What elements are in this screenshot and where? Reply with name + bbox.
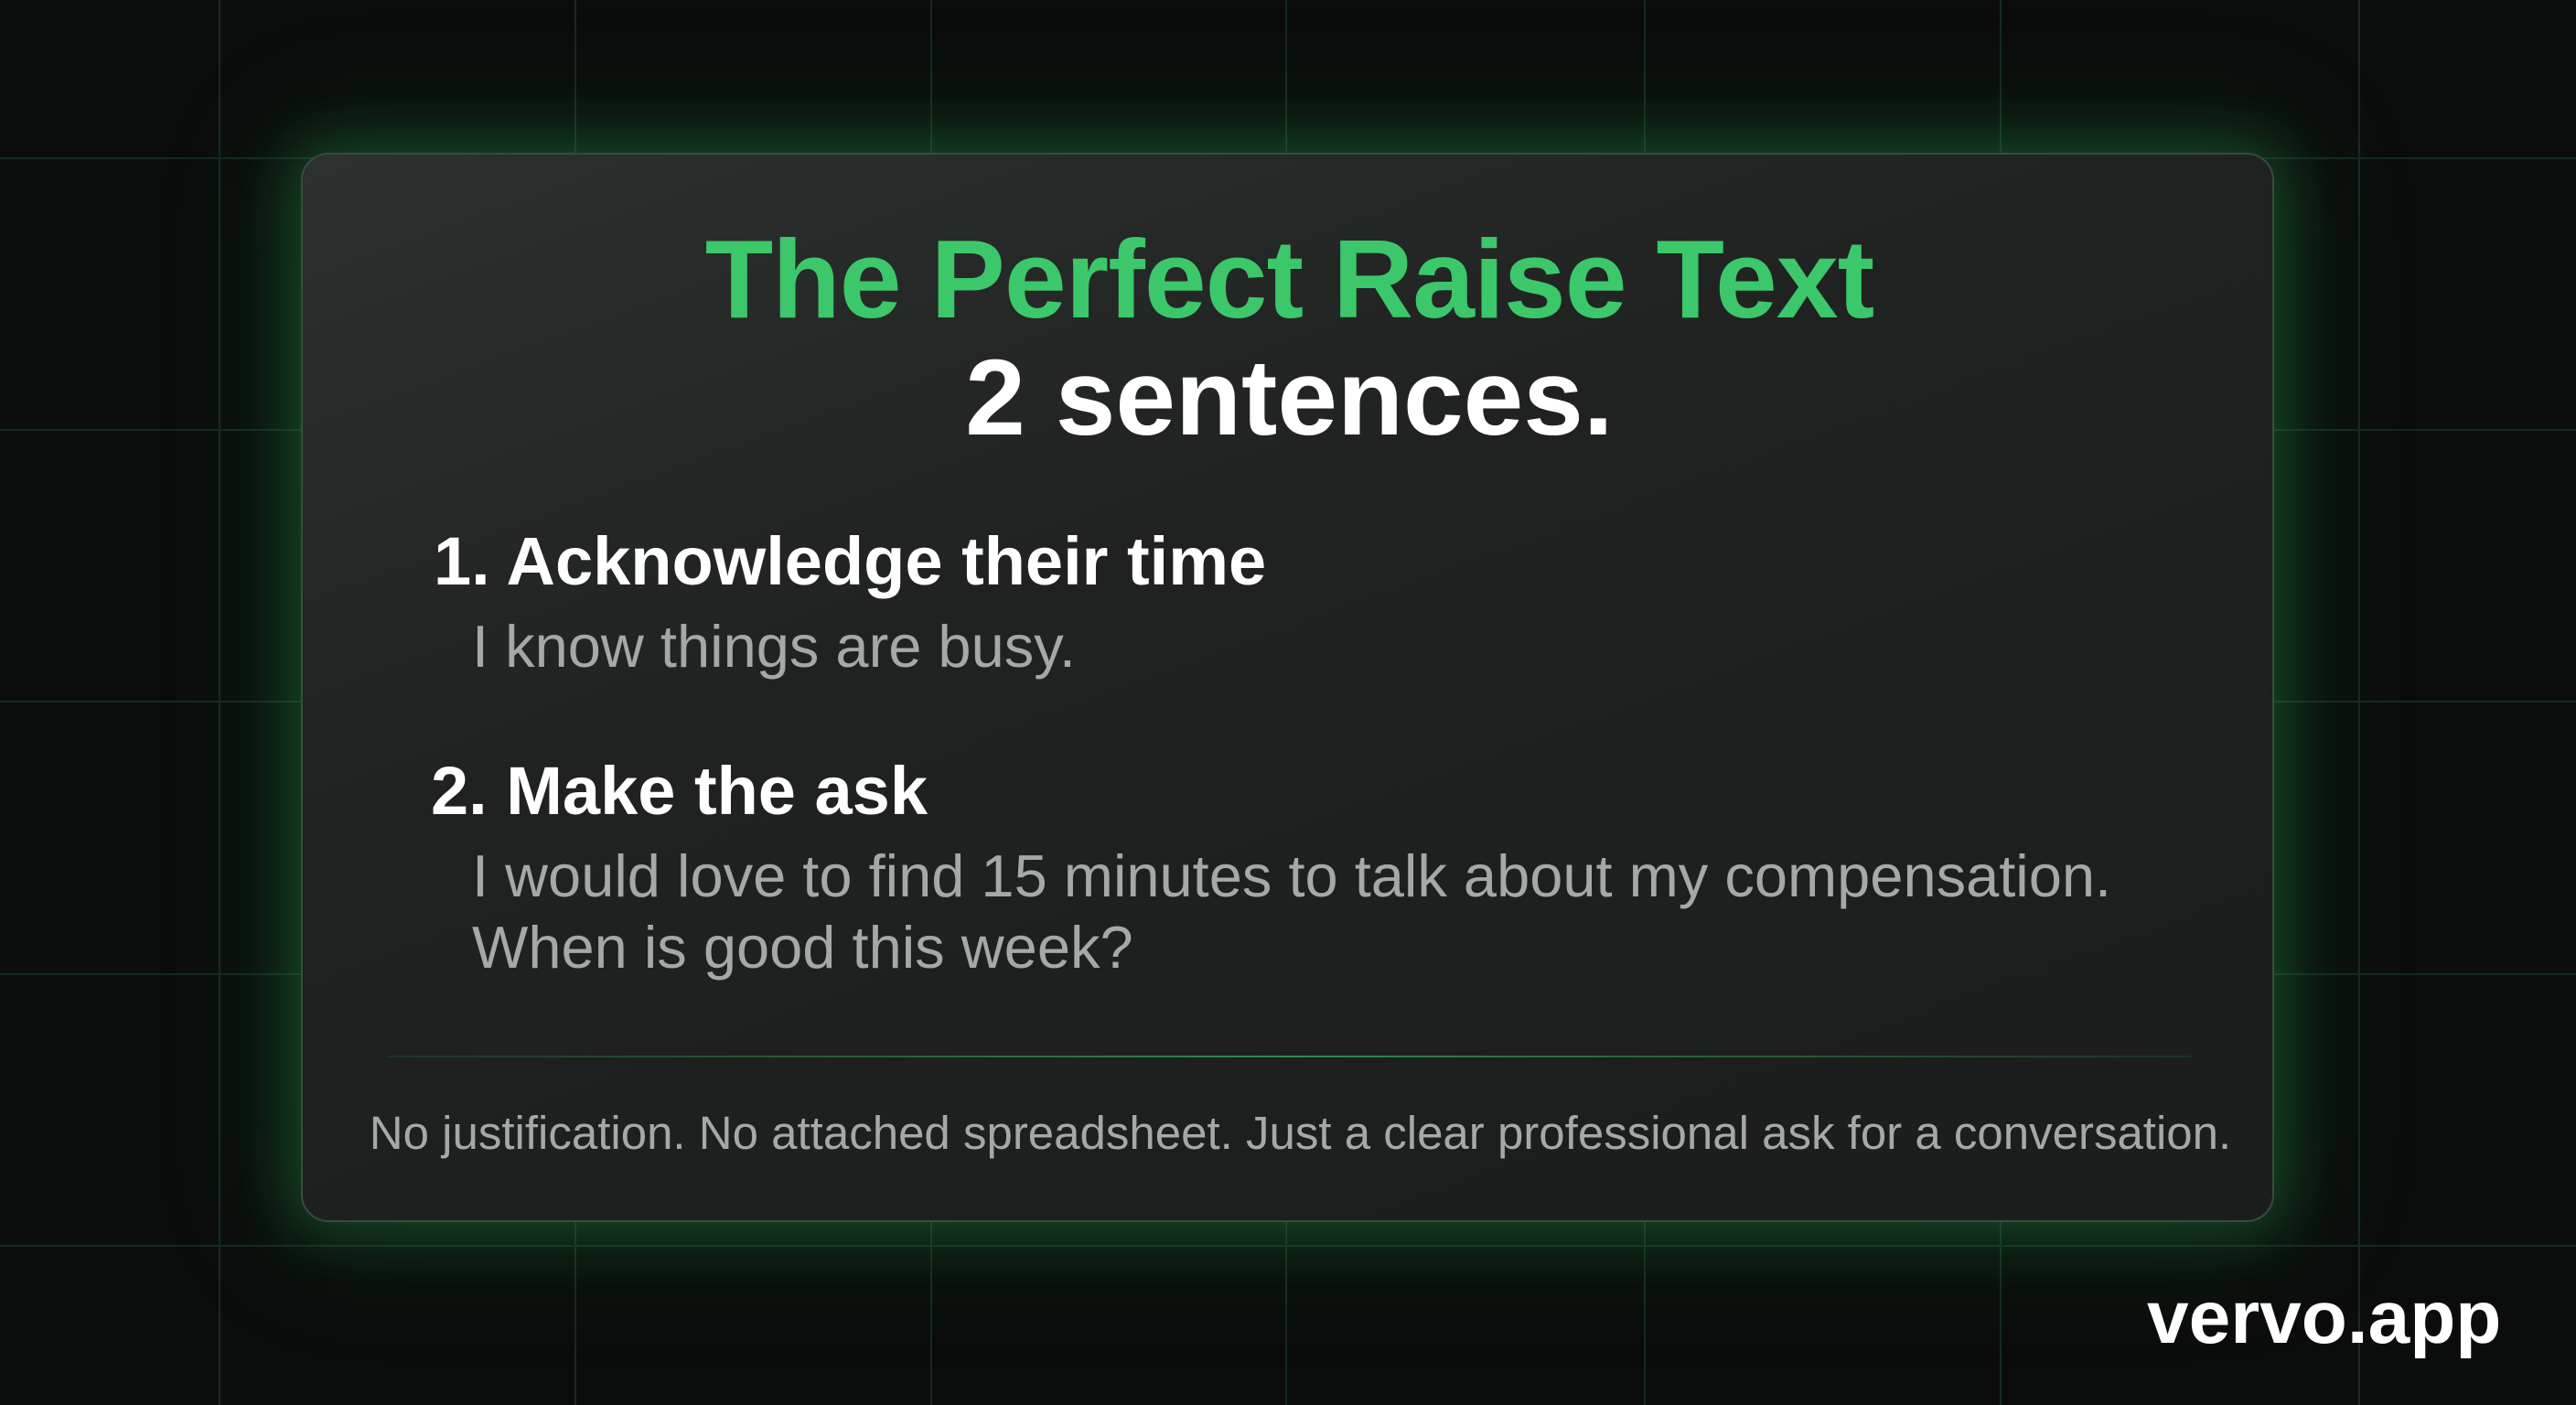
step 2 text: When is good this week?	[472, 914, 1133, 981]
step 2 text: I would love to find 15 minutes to talk about my compensation.	[472, 842, 2111, 909]
step 1 heading: 1. Acknowledge their time	[434, 523, 1266, 599]
brand: vervo.app	[2147, 1276, 2501, 1359]
step 1 text: I know things are busy.	[472, 613, 1076, 680]
step 2 heading: 2. Make the ask	[431, 753, 928, 829]
subtitle: 2 sentences.	[965, 338, 1614, 458]
title: The Perfect Raise Text	[705, 217, 1873, 341]
footer note: No justification. No attached spreadsheet. Just a clear professional ask for a conversation.	[370, 1107, 2231, 1159]
panel: main card	[301, 153, 2274, 1222]
step 2 text	[472, 842, 2111, 981]
